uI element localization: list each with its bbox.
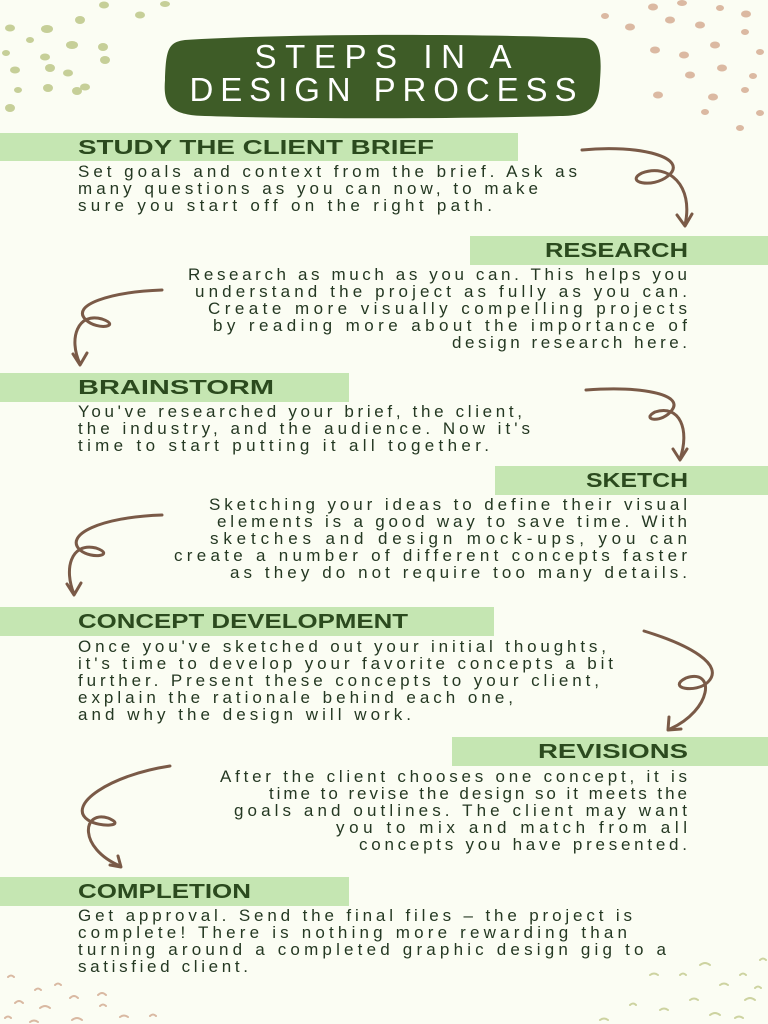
step: revisions: After the client chooses one concept, it is	[220, 767, 687, 786]
step: research: understand the project as fully as you can.	[195, 282, 687, 301]
arrow 5	[644, 631, 712, 730]
step: concept development: Once you've sketched out your initial thoughts,	[78, 637, 606, 656]
step: sketch: Sketching your ideas to define their visual	[209, 495, 687, 514]
step: completion: satisfied client.	[78, 957, 248, 976]
step: study the client brief	[0, 133, 577, 215]
step: revisions: REVISIONS	[538, 741, 688, 763]
step: research: RESEARCH	[545, 240, 688, 262]
title: DESIGN PROCESS	[190, 71, 576, 108]
step: completion: complete! There is nothing more rewarding than	[78, 923, 627, 942]
step: study the client brief: many questions as you can now, to make	[78, 179, 538, 198]
step: revisions: concepts you have presented.	[359, 835, 687, 854]
step: sketch: SKETCH	[586, 470, 688, 492]
step: revisions: you to mix and match from all	[336, 818, 687, 837]
step: completion: COMPLETION	[78, 881, 251, 903]
step: revisions	[220, 737, 768, 854]
arrow 4	[67, 515, 162, 595]
step: concept development: it's time to develop your favorite concepts a bit	[78, 654, 613, 673]
step: sketch: create a number of different concepts faster	[174, 546, 687, 565]
step: sketch: elements is a good way to save time. With	[217, 512, 687, 531]
title	[165, 35, 601, 118]
step: study the client brief: sure you start off on the right path.	[78, 196, 492, 215]
step: completion	[0, 877, 667, 976]
step: sketch	[174, 466, 768, 582]
step: study the client brief: Set goals and context from the brief. Ask as	[78, 162, 577, 181]
arrow 2	[73, 290, 162, 365]
step: revisions: time to revise the design so it meets the	[269, 784, 687, 803]
step: research: by reading more about the importance of	[213, 316, 687, 335]
step: completion: Get approval. Send the final files – the project is	[78, 906, 632, 925]
step: study the client brief: STUDY THE CLIENT BRIEF	[78, 137, 434, 159]
step: research	[188, 236, 768, 352]
title: STEPS IN A	[254, 38, 512, 75]
step: sketch: as they do not require too many details.	[230, 563, 687, 582]
step: sketch: sketches and design mock-ups, you can	[210, 529, 687, 548]
step: concept development: CONCEPT DEVELOPMENT	[78, 611, 408, 633]
step: research: Create more visually compelling projects	[208, 299, 687, 318]
step: research: design research here.	[452, 333, 687, 352]
arrow 6	[82, 766, 170, 867]
step: brainstorm: BRAINSTORM	[78, 377, 274, 399]
step: brainstorm: the industry, and the audience. Now it's	[78, 419, 530, 438]
step: concept development: further. Present these concepts to your client,	[78, 671, 599, 690]
arrow 3	[586, 389, 687, 460]
step: concept development	[0, 607, 613, 724]
step: concept development: explain the rationale behind each one,	[78, 688, 513, 707]
step: brainstorm: time to start putting it all together.	[78, 436, 489, 455]
step: brainstorm: You've researched your brief, the client,	[78, 402, 522, 421]
step: completion: turning around a completed graphic design gig to a	[78, 940, 667, 959]
step: revisions: goals and outlines. The client may want	[234, 801, 687, 820]
step: concept development: and why the design will work.	[78, 705, 411, 724]
step: brainstorm	[0, 373, 530, 455]
arrow 1	[582, 149, 692, 226]
step: research: Research as much as you can. This helps you	[188, 265, 687, 284]
